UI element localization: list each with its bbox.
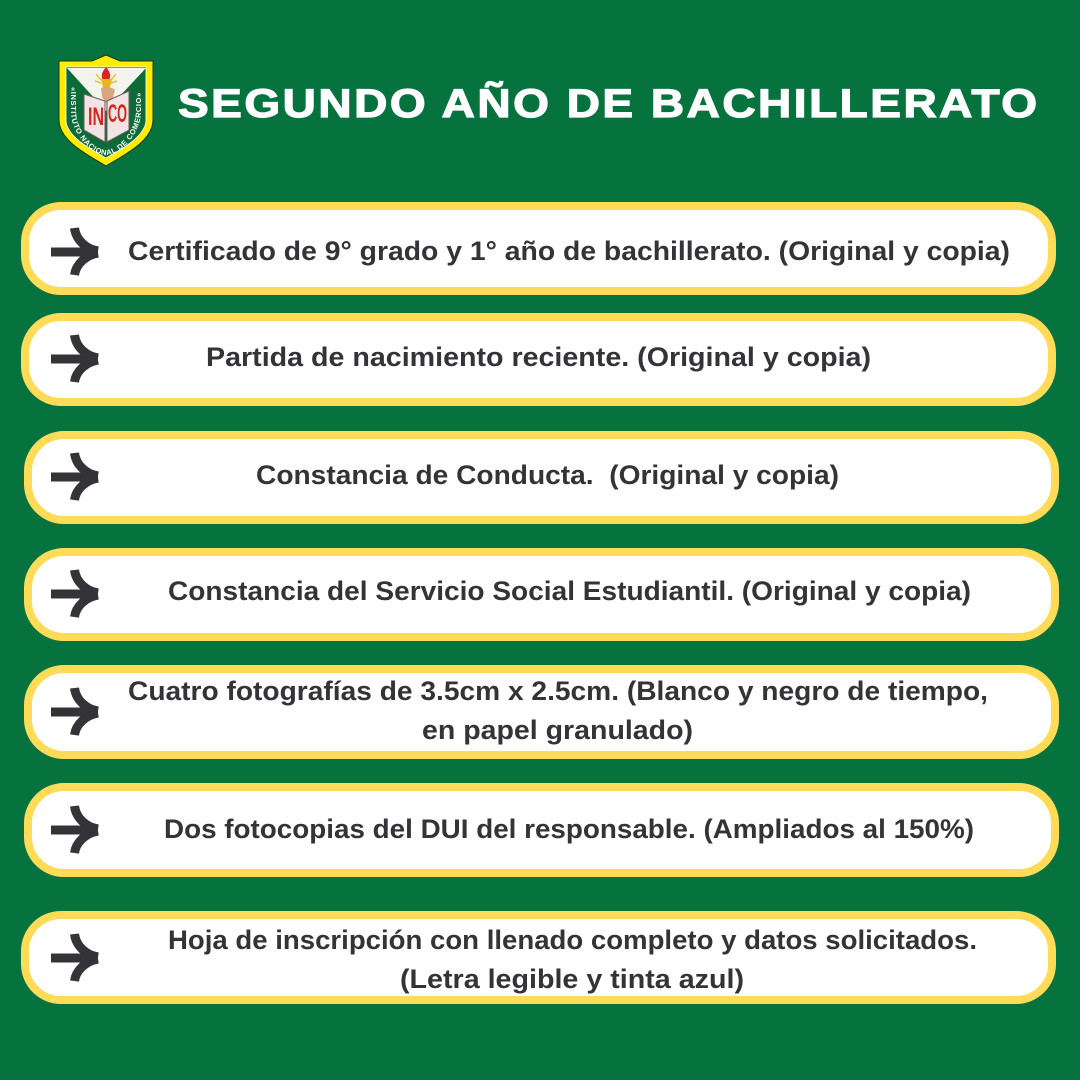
requirement 7: registration form [25,915,1052,1000]
logo: institute shield: IN [88,103,104,131]
requirement 3: conduct record: Constancia de Conducta. (Original y copia) [256,460,839,490]
requirement 4: social service record: Constancia del Servicio Social Estudiantil. (Original y copia) [168,576,971,606]
requirement 4: social service record [28,552,1055,637]
requirement 2: birth certificate: Partida de nacimiento reciente. (Original y copia) [206,342,871,372]
requirement 1: certificate: Certificado de 9° grado y 1° año de bachillerato. (Original y copia) [128,236,1010,266]
requirement 6: ID photocopies [28,787,1055,873]
requirement 7: registration form: Hoja de inscripción con llenado completo y datos solicitados. [168,925,977,955]
requirement 1: certificate [25,206,1052,291]
logo: institute shield [58,54,154,166]
logo: institute shield: «INSTITUTO NACIONAL DE COMERCIO» [71,87,141,156]
title: SEGUNDO AÑO DE BACHILLERATO [178,82,1037,126]
requirement 3: conduct record [28,435,1055,520]
requirement 5: photographs: en papel granulado) [422,715,693,745]
logo: institute shield: CO [108,100,127,128]
requirement 2: birth certificate [25,317,1052,402]
requirement 6: ID photocopies: Dos fotocopias del DUI del responsable. (Ampliados al 150%) [164,814,974,844]
requirement 7: registration form: (Letra legible y tinta azul) [400,964,744,994]
requirement 5: photographs [28,669,1055,755]
requirement 5: photographs: Cuatro fotografías de 3.5cm x 2.5cm. (Blanco y negro de tiempo, [128,676,988,706]
